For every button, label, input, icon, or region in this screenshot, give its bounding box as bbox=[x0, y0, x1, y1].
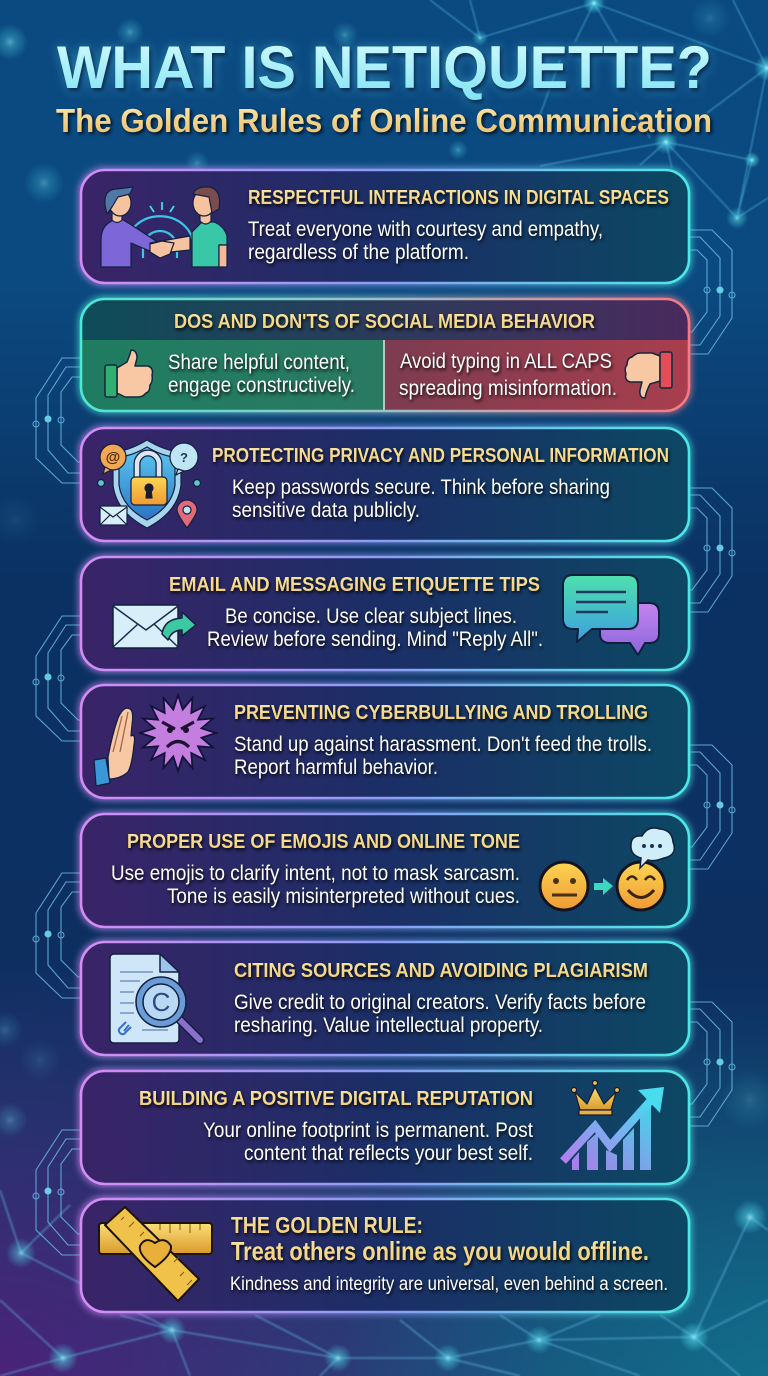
heading: BUILDING A POSITIVE DIGITAL REPUTATION bbox=[139, 1088, 533, 1110]
body text bbox=[232, 475, 610, 522]
heading bbox=[231, 1212, 649, 1266]
heading: RESPECTFUL INTERACTIONS IN DIGITAL SPACES bbox=[248, 187, 669, 209]
do text: Share helpful content, bbox=[168, 350, 350, 374]
body text: Kindness and integrity are universal, even behind a screen. bbox=[230, 1274, 668, 1295]
body text: Report harmful behavior. bbox=[234, 755, 438, 779]
don't text: spreading misinformation. bbox=[399, 376, 617, 400]
heading: PREVENTING CYBERBULLYING AND TROLLING bbox=[234, 702, 648, 724]
don't text: Avoid typing in ALL CAPS bbox=[400, 349, 612, 373]
body text: regardless of the platform. bbox=[248, 240, 469, 264]
icon: thumbs up bbox=[105, 350, 152, 397]
panel: digital reputation bbox=[81, 1071, 689, 1184]
panel: respectful interactions bbox=[81, 170, 689, 283]
heading: EMAIL AND MESSAGING ETIQUETTE TIPS bbox=[169, 574, 540, 596]
body text: Your online footprint is permanent. Post bbox=[203, 1118, 533, 1142]
heading: DOS AND DON'TS OF SOCIAL MEDIA BEHAVIOR bbox=[174, 311, 595, 333]
body text: Give credit to original creators. Verify facts before bbox=[234, 990, 646, 1014]
don't text bbox=[399, 349, 617, 400]
icon: golden rulers and heart bbox=[99, 1207, 212, 1301]
panel: dos and don'ts bbox=[81, 299, 689, 411]
body text bbox=[207, 604, 543, 651]
body text: Stand up against harassment. Don't feed the trolls. bbox=[234, 732, 652, 756]
icon: chat bubbles bbox=[563, 575, 659, 655]
body text bbox=[248, 217, 603, 264]
icon: thumbs down bbox=[625, 352, 672, 398]
do text bbox=[168, 350, 355, 397]
body text: Be concise. Use clear subject lines. bbox=[225, 604, 517, 628]
title: WHAT IS NETIQUETTE? bbox=[57, 34, 712, 101]
icon: shield with lock bbox=[98, 440, 200, 528]
heading: PROTECTING PRIVACY AND PERSONAL INFORMATION bbox=[212, 445, 669, 467]
body text: sensitive data publicly. bbox=[232, 498, 420, 522]
body text bbox=[111, 861, 520, 908]
panel: email etiquette bbox=[81, 557, 689, 670]
panel: the golden rule bbox=[81, 1199, 689, 1312]
body text bbox=[234, 990, 646, 1037]
icon: crown bbox=[572, 1080, 620, 1115]
panel: protecting privacy bbox=[81, 428, 689, 541]
panel: protecting privacy: @ bbox=[106, 449, 120, 466]
heading: THE GOLDEN RULE: bbox=[231, 1212, 423, 1238]
body text: Review before sending. Mind "Reply All". bbox=[207, 627, 543, 651]
icon: document and magnifier bbox=[110, 954, 200, 1043]
body text bbox=[203, 1118, 533, 1165]
panel: cyberbullying bbox=[81, 685, 689, 798]
body text: Tone is easily misinterpreted without cues. bbox=[167, 884, 520, 908]
body text: Keep passwords secure. Think before sharing bbox=[232, 475, 610, 499]
body text: content that reflects your best self. bbox=[244, 1141, 533, 1165]
body text: Treat everyone with courtesy and empathy, bbox=[248, 217, 603, 241]
panel: citing sources: C bbox=[152, 987, 170, 1017]
do text: engage constructively. bbox=[168, 373, 355, 397]
body text: resharing. Value intellectual property. bbox=[234, 1013, 543, 1037]
icon: stop hand bbox=[94, 708, 135, 786]
icon: handshake bbox=[101, 187, 227, 267]
icon: rising chart bbox=[563, 1087, 664, 1170]
body text bbox=[234, 732, 652, 779]
panel: protecting privacy: ? bbox=[180, 450, 188, 465]
icon: neutral to smile bbox=[540, 828, 674, 910]
heading: PROPER USE OF EMOJIS AND ONLINE TONE bbox=[127, 831, 520, 853]
heading: Treat others online as you would offline. bbox=[231, 1236, 649, 1266]
heading: CITING SOURCES AND AVOIDING PLAGIARISM bbox=[234, 960, 648, 982]
circuit connectors bbox=[33, 230, 735, 1255]
panel: emojis and tone bbox=[81, 814, 689, 927]
subtitle: The Golden Rules of Online Communication bbox=[56, 102, 712, 139]
panel: citing sources bbox=[81, 942, 689, 1055]
icon: angry burst bbox=[140, 695, 216, 771]
body text: Use emojis to clarify intent, not to mask sarcasm. bbox=[111, 861, 520, 885]
icon: envelope with arrow bbox=[113, 605, 196, 648]
